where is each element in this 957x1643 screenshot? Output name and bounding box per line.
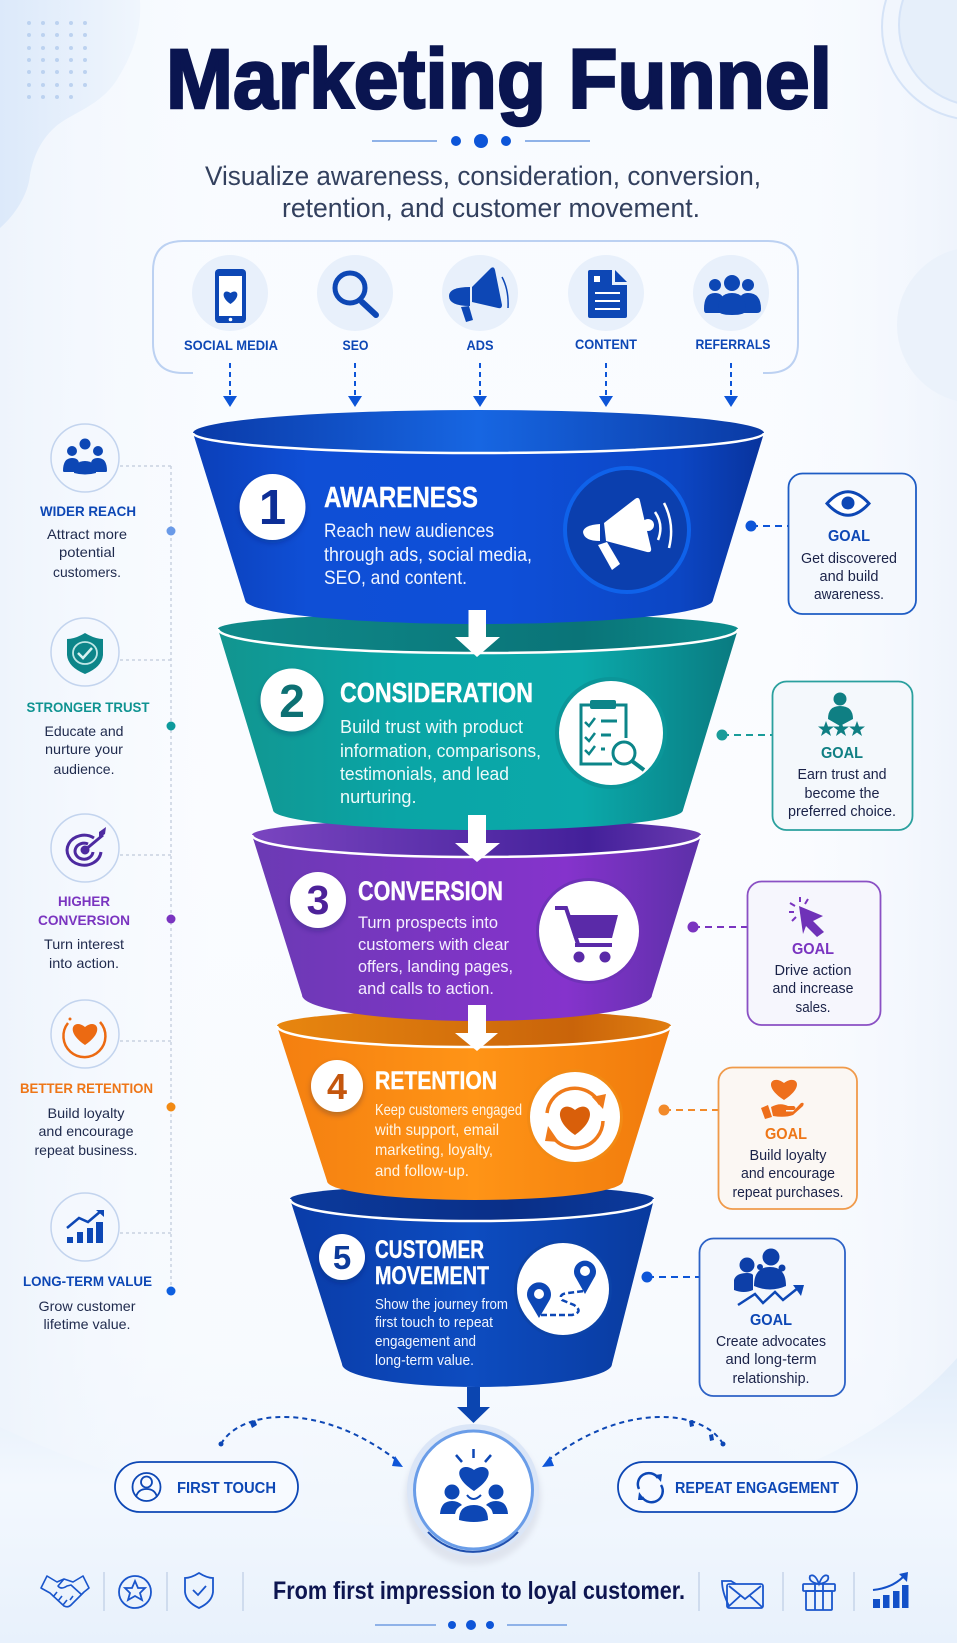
benefit: better retention: Build loyalty (48, 1105, 124, 1121)
goal 3 (688, 882, 880, 1025)
dashed arc: first touch to customer (218, 1417, 403, 1467)
left benefit connector (120, 466, 171, 1292)
arrow: stage 2 to 3 (455, 815, 500, 862)
connector dots (166, 526, 176, 1296)
number badge 5: 5 (333, 1239, 351, 1276)
benefit: better retention (20, 1000, 153, 1158)
goal 5: GOAL (750, 1312, 792, 1329)
number badge 1 (240, 474, 306, 540)
goal 3: GOAL (792, 941, 834, 958)
number badge 4: 4 (327, 1066, 347, 1107)
number badge 3 (290, 872, 346, 928)
title divider (372, 134, 590, 148)
description: and follow-up. (375, 1163, 469, 1180)
description: with support, email (374, 1122, 499, 1139)
benefit: long-term value: LONG-TERM VALUE (23, 1273, 152, 1289)
goal 5: relationship. (732, 1370, 810, 1387)
source: seo: SEO (342, 337, 369, 353)
description: marketing, loyalty, (375, 1142, 493, 1159)
source: social media (184, 255, 278, 353)
description: engagement and (375, 1333, 476, 1350)
description: first touch to repeat (375, 1314, 494, 1331)
source: ads: ADS (466, 337, 494, 353)
icon: journey map (514, 1240, 612, 1338)
benefit: wider reach: WIDER REACH (40, 503, 136, 519)
description: through ads, social media, (324, 545, 532, 566)
heading: customer movement (375, 1236, 489, 1290)
goal 2: GOAL (821, 745, 863, 762)
footer tagline: From first impression to loyal customer. (273, 1577, 685, 1605)
goal 5: and long-term (726, 1351, 816, 1368)
goal 4 (658, 1068, 857, 1209)
heading: customer movement: MOVEMENT (375, 1262, 489, 1290)
benefit: stronger trust: nurture your (45, 741, 123, 757)
benefit: higher conversion (38, 814, 130, 971)
source: referrals (693, 255, 770, 352)
subtitle: retention, and customer movement. (282, 193, 700, 223)
footer separators (104, 1572, 854, 1611)
benefit: long-term value (23, 1193, 152, 1332)
funnel stage 4: retention (277, 1010, 671, 1200)
benefit: stronger trust: audience. (54, 761, 114, 777)
benefit: higher conversion: into action. (49, 955, 119, 971)
benefit: better retention: BETTER RETENTION (20, 1080, 153, 1096)
icon: gift (803, 1575, 835, 1610)
goal 1: GOAL (828, 528, 870, 545)
goal 3: and increase (772, 980, 854, 997)
description: Show the journey from (375, 1296, 508, 1313)
icon: shopping cart (536, 878, 642, 984)
heading: awareness: AWARENESS (324, 482, 478, 514)
description: information, comparisons, (340, 740, 541, 761)
goal 1: and build (820, 568, 878, 585)
benefit: long-term value: lifetime value. (44, 1316, 130, 1332)
goal 4: Build loyalty (750, 1147, 827, 1164)
goal 4: repeat purchases. (732, 1184, 844, 1201)
description: Keep customers engaged (375, 1102, 522, 1119)
source: seo (317, 255, 393, 353)
description: offers, landing pages, (358, 957, 513, 976)
description (375, 1296, 508, 1369)
center: loyal customer (405, 1424, 541, 1565)
heading: retention: RETENTION (375, 1067, 497, 1095)
footer divider (375, 1620, 567, 1630)
icon: heart cycle (527, 1069, 623, 1165)
source: content (568, 255, 644, 352)
heading: customer movement: CUSTOMER (375, 1236, 484, 1264)
description: and calls to action. (358, 979, 494, 998)
arrow: stage 3 to 4 (455, 1005, 498, 1051)
number badge 3: 3 (307, 877, 329, 923)
dashed arc: repeat engagement to customer (542, 1417, 726, 1467)
subtitle (205, 161, 761, 223)
number badge 5 (319, 1234, 365, 1280)
arrows: sources into funnel (223, 363, 738, 407)
goal 5: Create advocates (716, 1333, 826, 1350)
goal 1: Get discovered (801, 550, 897, 567)
funnel stage 2: consideration (218, 613, 738, 830)
description: long-term value. (375, 1352, 474, 1369)
funnel stage 1: awareness (193, 410, 764, 624)
goal 4: and encourage (741, 1165, 835, 1182)
benefit: wider reach: potential (59, 544, 115, 560)
description: Reach new audiences (324, 521, 494, 542)
benefit: higher conversion: HIGHER (58, 893, 110, 909)
pill: repeat engagement: REPEAT ENGAGEMENT (675, 1480, 839, 1497)
benefit: wider reach: Attract more (47, 526, 127, 542)
pill: repeat engagement (618, 1462, 857, 1512)
goal 3: sales. (796, 999, 830, 1016)
arrow: stage 1 to 2 (455, 610, 500, 657)
description: Build trust with product (340, 716, 523, 737)
goal 2: become the (804, 785, 880, 802)
goal 2 (716, 682, 912, 830)
source: ads (442, 255, 518, 353)
icon: handshake (41, 1576, 89, 1607)
title: Marketing Funnel (166, 32, 832, 126)
description (324, 521, 532, 589)
icon: growth chart (873, 1572, 908, 1608)
description: nurturing. (340, 786, 416, 807)
arrow: stage 5 to customer (457, 1387, 490, 1423)
icon: mail (722, 1581, 763, 1608)
description: customers with clear (358, 935, 509, 954)
goal 4: GOAL (765, 1126, 807, 1143)
description: testimonials, and lead (340, 763, 509, 784)
goal 3: Drive action (774, 962, 852, 979)
heading: conversion: CONVERSION (358, 876, 503, 906)
heading: consideration: CONSIDERATION (340, 677, 533, 708)
source: social media: SOCIAL MEDIA (184, 337, 278, 353)
description: Turn prospects into (358, 913, 498, 932)
pill: first touch (115, 1462, 298, 1512)
benefit: stronger trust: Educate and (44, 723, 124, 739)
goal 5 (642, 1238, 845, 1396)
benefit: wider reach: customers. (53, 564, 121, 580)
icon: megaphone (565, 468, 689, 592)
pill: first touch: FIRST TOUCH (177, 1480, 276, 1497)
description: SEO, and content. (324, 568, 467, 589)
number badge 4 (311, 1060, 363, 1112)
goal 2: Earn trust and (798, 766, 886, 783)
panel: traffic sources (153, 241, 798, 373)
benefit: stronger trust: STRONGER TRUST (26, 699, 150, 715)
icon: shield check (185, 1573, 213, 1608)
benefit: stronger trust (26, 618, 150, 777)
funnel stage 3: conversion (252, 819, 701, 1021)
number badge 2 (260, 668, 324, 732)
benefit: better retention: and encourage (38, 1123, 134, 1139)
benefit: higher conversion: Turn interest (44, 936, 124, 952)
benefit: better retention: repeat business. (34, 1142, 138, 1158)
description (358, 913, 513, 998)
description (374, 1102, 522, 1180)
source: content: CONTENT (575, 336, 637, 352)
number badge 2: 2 (279, 675, 305, 727)
source: referrals: REFERRALS (696, 336, 770, 352)
funnel stage 5: customer movement (290, 1185, 654, 1387)
subtitle: Visualize awareness, consideration, conversion, (205, 161, 761, 191)
benefit: higher conversion: CONVERSION (38, 912, 130, 928)
icon: star badge (119, 1576, 151, 1608)
benefit: wider reach (40, 424, 136, 580)
goal 1 (746, 474, 916, 614)
icon: checklist search (555, 677, 667, 789)
goal 2: preferred choice. (788, 803, 896, 820)
description (340, 716, 541, 807)
benefit: long-term value: Grow customer (38, 1298, 136, 1314)
number badge 1: 1 (259, 481, 286, 535)
goal 1: awareness. (814, 586, 884, 603)
